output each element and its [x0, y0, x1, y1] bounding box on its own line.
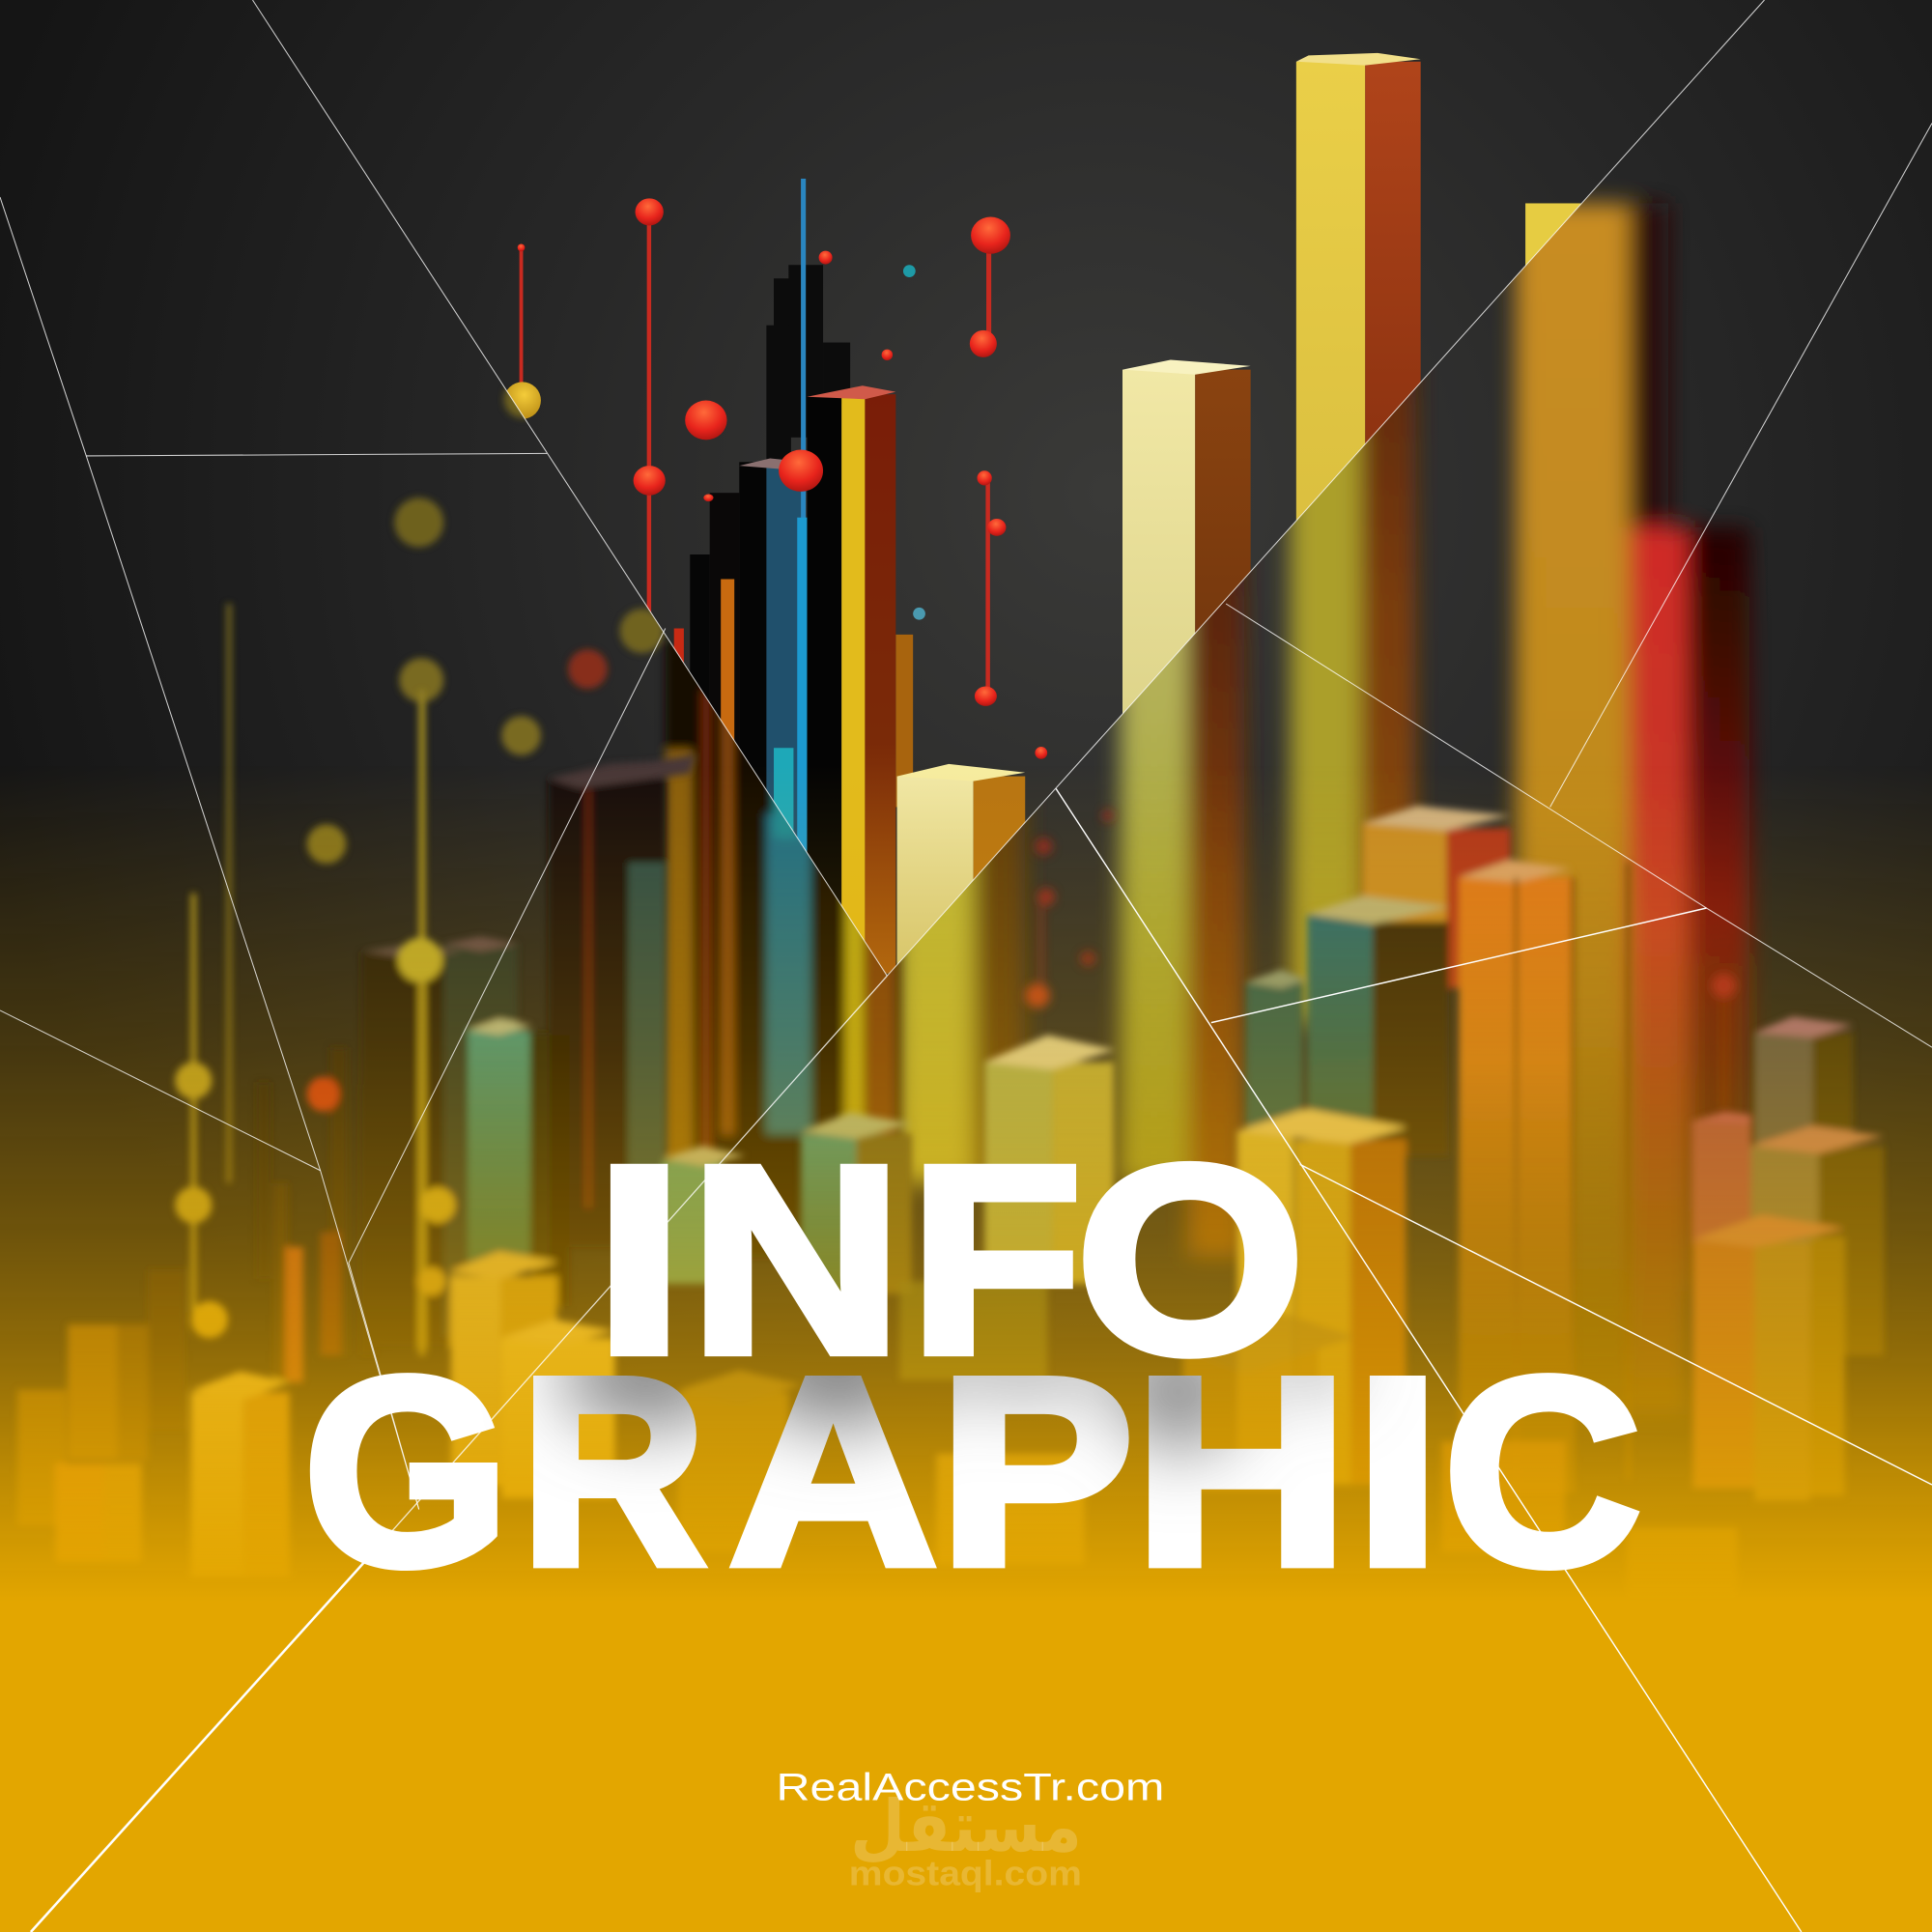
blurred tall back bars [897, 185, 1749, 1417]
dark bar cluster [361, 754, 696, 1347]
bar: teal centre [801, 1113, 912, 1293]
stems with yellow balls [191, 604, 425, 1355]
red mini spheres [1025, 810, 1736, 1109]
bar: pale short [897, 764, 1025, 1023]
title line 2: A [728, 1321, 938, 1621]
website url: RealAccessTr.com [777, 1767, 1164, 1809]
blurred red balls [307, 649, 608, 1112]
watermark arabic: مستقل [850, 1785, 1082, 1868]
bars: far lower left [17, 1320, 616, 1577]
blurred left scene [17, 381, 1884, 1602]
bar: tall yellow [1296, 53, 1421, 801]
title line 2: C [1443, 1321, 1641, 1621]
bar: yellow right sliver [1525, 203, 1600, 301]
title line 1: N [690, 1110, 902, 1409]
red spheres [518, 198, 1047, 759]
title line 1: I [594, 1110, 685, 1409]
bar: pale teal low [663, 1146, 746, 1284]
teal spheres [903, 265, 925, 620]
bar: teal small [1246, 970, 1306, 1130]
bar: tall orange right [1516, 203, 1668, 1417]
bar: tall yellow continuation [1290, 185, 1416, 1023]
title line 2: P [938, 1321, 1134, 1621]
title line 2: H [1133, 1321, 1350, 1621]
tower lower [666, 616, 899, 1257]
bar: yellow lower left [450, 1252, 557, 1486]
bar: red [1629, 527, 1749, 1414]
central tower [674, 179, 913, 985]
bar: salmon right [1693, 1215, 1844, 1501]
bar: orange wide [1237, 1109, 1407, 1485]
title [303, 1110, 1641, 1621]
bar: pale block [984, 1035, 1115, 1284]
blurred central tower [666, 616, 1736, 1257]
bar: beige right [1750, 1126, 1884, 1355]
panel: sharp bars and spheres [504, 53, 1600, 1023]
spire [742, 265, 850, 542]
solid gold base [0, 1602, 1932, 1932]
bar: pink right [1691, 1112, 1750, 1244]
title line 2: G [303, 1321, 509, 1621]
teal bar left [469, 1019, 550, 1266]
title line 2: I [1353, 1321, 1441, 1621]
bar: teal large [1307, 895, 1449, 1155]
bars: low centre haze [678, 1282, 1737, 1602]
title line 1: F [910, 1110, 1082, 1409]
blurred yellow balls [175, 381, 665, 1338]
bar: grey right [1754, 1016, 1853, 1144]
panel: blurred glass facets [17, 185, 1884, 1602]
bar: pale [1122, 359, 1251, 985]
watermark [849, 1785, 1082, 1893]
bar: orange block [1459, 860, 1631, 1493]
thin left stems [148, 1047, 377, 1430]
title line 1: O [1076, 1110, 1305, 1409]
stems [520, 222, 991, 693]
title line 2: R [521, 1321, 706, 1621]
watermark latin: mostaql.com [849, 1855, 1082, 1893]
bar: pale short continuation [897, 788, 1025, 1182]
gold gradient overlay [0, 764, 1932, 1932]
bar: orange red block [1363, 806, 1511, 996]
yellow sphere [504, 382, 541, 419]
tower columns [674, 179, 913, 985]
bar: pale continuation [1120, 493, 1244, 1257]
